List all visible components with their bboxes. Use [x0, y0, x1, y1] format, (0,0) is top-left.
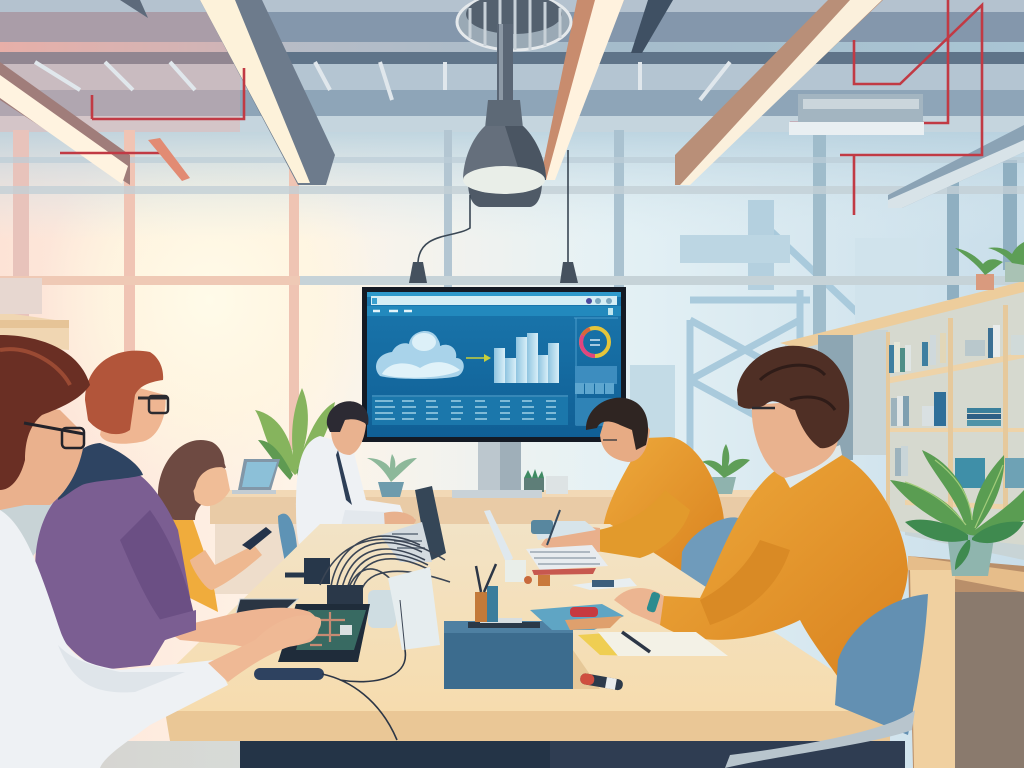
data table: [372, 396, 568, 425]
neck and face: [752, 400, 838, 478]
ceiling fan vent: [457, 0, 571, 50]
hand on board: [208, 615, 321, 682]
hand and watch: [614, 588, 664, 625]
hair: [586, 398, 648, 450]
arm: [340, 510, 415, 530]
tablet: [234, 599, 298, 622]
face: [190, 464, 230, 506]
monitor frame: [362, 287, 626, 442]
blue box with device: [444, 618, 573, 689]
arm: orange sweater person writing: [541, 490, 690, 558]
collar: [780, 445, 842, 488]
neck and face: [0, 400, 85, 510]
person: girl with phone: [158, 440, 272, 612]
crane outside window: [630, 200, 917, 465]
bookshelf: [780, 242, 1024, 560]
red pipes: [60, 0, 982, 215]
ceiling: [0, 0, 1024, 132]
cable and adapter: [254, 650, 405, 740]
plant on cabinet: [890, 450, 1024, 576]
air conditioner: [789, 94, 924, 135]
neck and face: [100, 380, 166, 444]
right cabinet: [908, 556, 1024, 768]
pink ceiling lamp: [148, 138, 190, 181]
monitor: [362, 287, 626, 498]
shelf plants: [955, 242, 1024, 290]
ceiling lights: [0, 0, 1024, 208]
table cables and router: [285, 536, 450, 650]
pen cup: [475, 564, 498, 622]
torso: [0, 510, 228, 768]
upper window haze: [0, 130, 1024, 240]
windows: mullions: [0, 130, 1024, 470]
back wall and desk: [0, 470, 810, 594]
chair: [680, 517, 738, 598]
chair: [835, 594, 928, 735]
desk notebooks and papers: [524, 575, 728, 656]
hair: [0, 335, 90, 490]
person: purple hoodie: [35, 351, 319, 670]
small spotlights and cords: [409, 150, 578, 283]
monitor screen: [367, 292, 621, 437]
chair: standing man: [278, 514, 298, 563]
arm and phone: [190, 545, 262, 590]
side panel tiles: [575, 366, 617, 425]
torso: [600, 437, 724, 578]
table: [0, 524, 905, 768]
bar chart: [494, 333, 559, 383]
back laptop: [232, 459, 280, 494]
pendant lamp: [463, 24, 546, 207]
back plant left: [255, 388, 335, 482]
head: [331, 412, 366, 455]
open notebook laptop right: [484, 510, 608, 582]
person: right foreground: [614, 346, 928, 768]
arrow: [466, 354, 491, 362]
neck and face: [600, 415, 650, 462]
person: seated orange sweater: [586, 398, 738, 598]
torso: [35, 465, 195, 670]
chair base: [725, 710, 915, 768]
arm: [165, 608, 319, 648]
glasses: [24, 423, 84, 434]
glasses: [138, 396, 168, 400]
books: [889, 325, 1024, 488]
hair: [737, 346, 849, 448]
hair: [85, 351, 163, 434]
sun glow: [40, 110, 380, 490]
glasses: [752, 407, 775, 409]
torso: [656, 452, 908, 680]
browser toolbar: [367, 292, 621, 316]
donut chart: [574, 318, 620, 425]
circuit board: [278, 604, 370, 662]
marker on table: [579, 673, 624, 691]
person: foreground woman in white: [0, 335, 321, 768]
laptop center: [380, 486, 446, 562]
hair: [158, 440, 225, 520]
left wall shelf: [0, 278, 69, 350]
glasses: [603, 439, 617, 441]
hood: [58, 443, 143, 500]
hair: [327, 401, 368, 432]
person: man at monitor: [296, 401, 416, 555]
cloud graphic: [376, 331, 464, 379]
monitor stand: [452, 442, 542, 498]
small plants on desk: [367, 444, 750, 497]
torso: [168, 510, 218, 612]
box shadow on table: [444, 650, 600, 689]
torso: [296, 436, 405, 555]
